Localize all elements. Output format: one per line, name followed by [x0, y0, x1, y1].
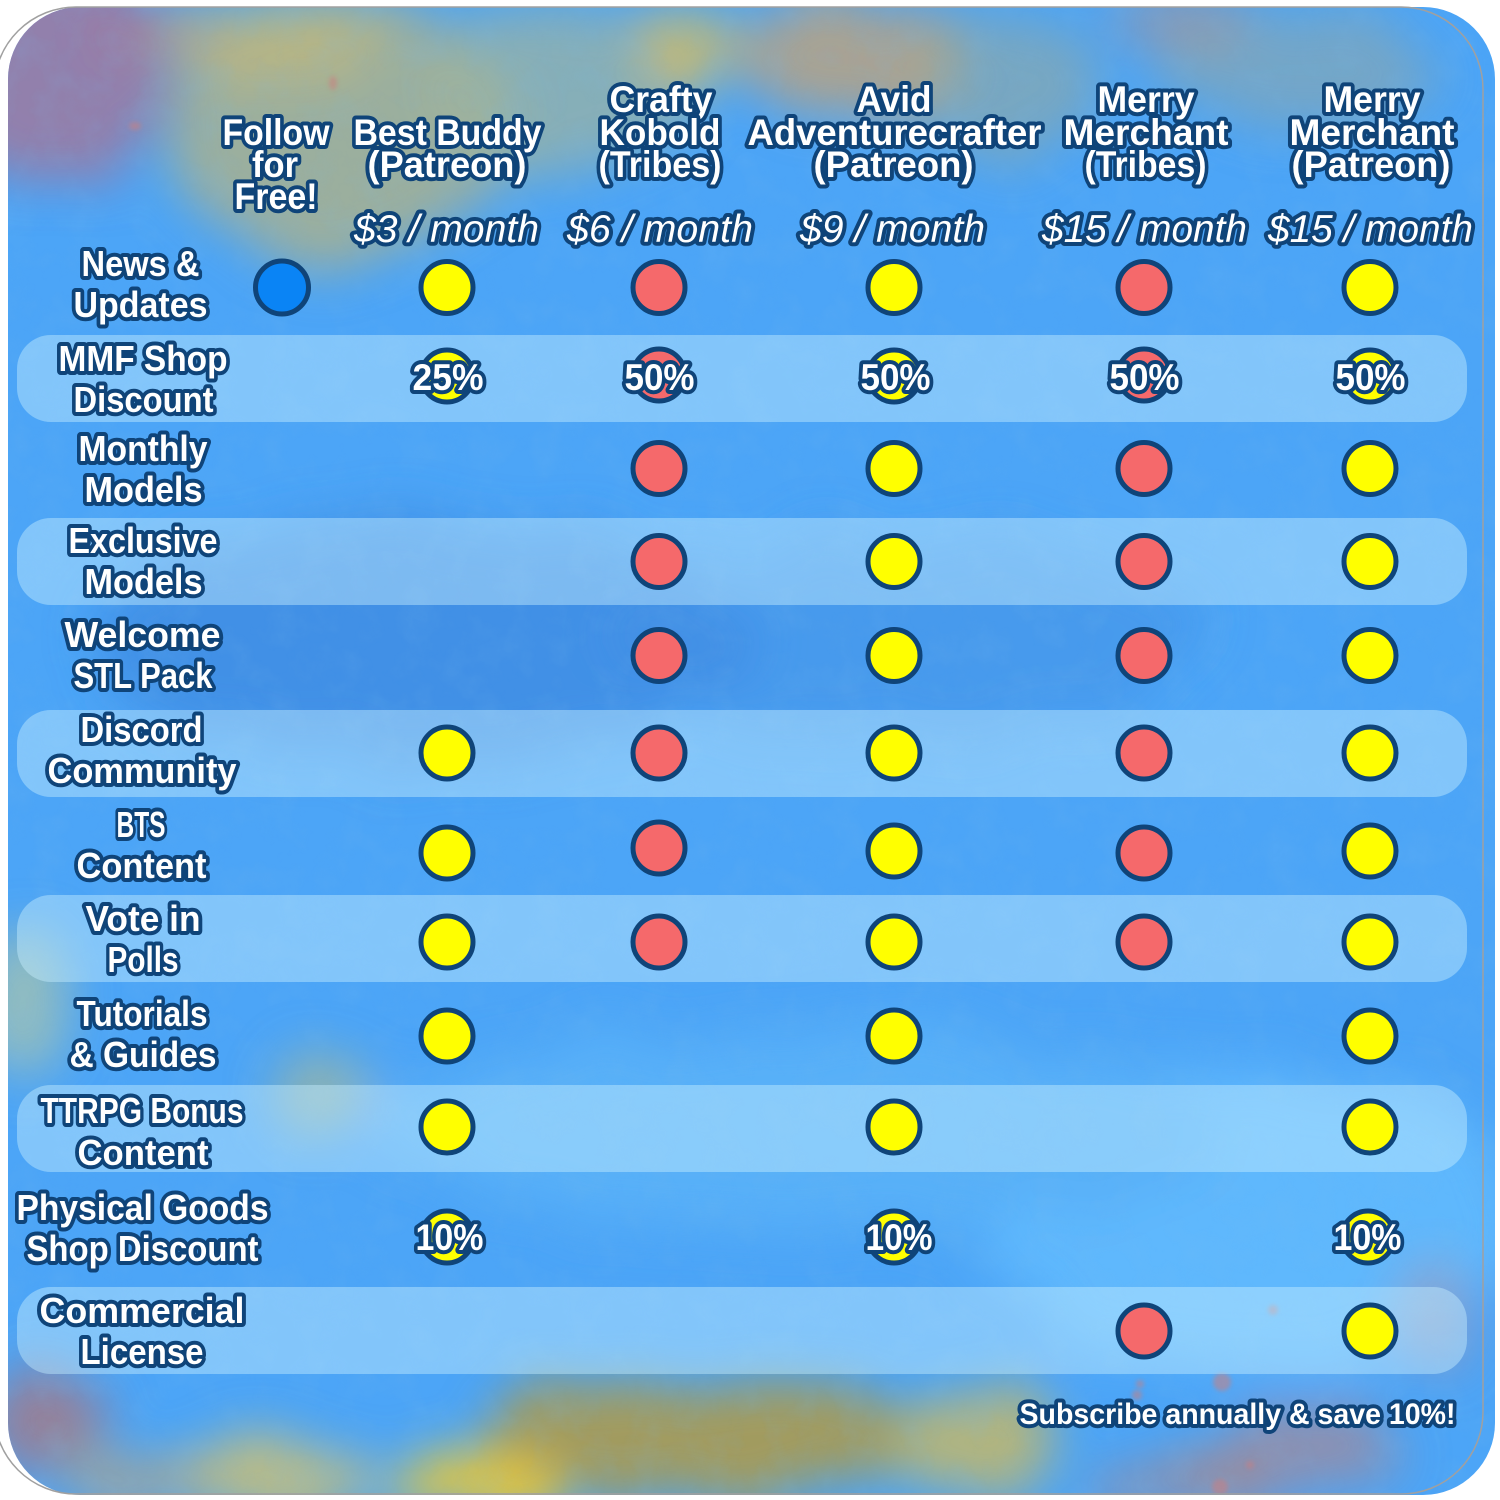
column header: Merry Merchant Patreon: Merry: [1324, 79, 1421, 120]
column header: Best Buddy: $3 / month: [353, 208, 539, 251]
row: Commercial License: [40, 1290, 1396, 1372]
row: MMF Shop Discount: 50%: [624, 357, 694, 398]
column header: Best Buddy: Best Buddy: [354, 112, 542, 153]
row: Discord Community: Community: [48, 750, 236, 791]
row: News & Updates: Updates: [74, 284, 208, 325]
column header: Merry Merchant Tribes: $15 / month: [1041, 208, 1247, 251]
row: MMF Shop Discount: MMF Shop: [58, 338, 228, 379]
row: MMF Shop Discount: [58, 338, 1406, 420]
row: Vote in Polls: Polls: [108, 939, 178, 980]
row: Exclusive Models: Exclusive: [68, 520, 218, 561]
row: Exclusive Models: Models: [84, 561, 202, 602]
column header: Crafty Kobold: $6 / month: [566, 208, 753, 251]
row: Tutorials & Guides: Tutorials: [76, 993, 208, 1034]
row: Physical Goods Shop Discount: Physical Goods: [16, 1187, 268, 1228]
row: BTS Content: [76, 804, 1396, 886]
row: TTRPG Bonus Content: TTRPG Bonus: [40, 1090, 244, 1131]
column header: Merry Merchant Tribes: Merchant: [1064, 112, 1228, 153]
column header: Merry Merchant Patreon: Merchant: [1290, 112, 1454, 153]
column header: Merry Merchant Tribes: (Tribes): [1084, 144, 1206, 185]
row bands: [17, 335, 1467, 1374]
row: MMF Shop Discount: Discount: [74, 379, 214, 420]
footnote: annual discount: Subscribe annually & save 10%!: [1020, 1398, 1456, 1431]
row: BTS Content: Content: [76, 845, 207, 886]
column header: Merry Merchant Patreon: (Patreon): [1292, 144, 1450, 185]
column header: Avid Adventurecrafter: $9 / month: [799, 208, 985, 251]
column header: Avid Adventurecrafter: [748, 79, 1042, 251]
row: Monthly Models: Models: [84, 469, 202, 510]
row: Tutorials & Guides: [70, 993, 1396, 1075]
row: Monthly Models: Monthly: [78, 428, 208, 469]
row: TTRPG Bonus Content: Content: [78, 1132, 209, 1173]
column header: Follow for Free: for: [252, 144, 298, 185]
row: Discord Community: Discord: [80, 709, 202, 750]
column header: Merry Merchant Patreon: $15 / month: [1267, 208, 1473, 251]
column header: Crafty Kobold: Kobold: [600, 112, 720, 153]
column header: Crafty Kobold: (Tribes): [598, 144, 722, 185]
row: MMF Shop Discount: 50%: [1336, 357, 1406, 398]
column header: Crafty Kobold: [566, 79, 753, 251]
column header: Follow for Free: [222, 112, 330, 217]
row: Physical Goods Shop Discount: 10%: [1334, 1217, 1402, 1258]
row: Monthly Models: [78, 428, 1396, 510]
row: Discord Community: [48, 709, 1396, 791]
column header: Avid Adventurecrafter: Adventurecrafter: [748, 112, 1042, 153]
column header: Follow for Free: Follow: [222, 112, 330, 153]
row: TTRPG Bonus Content: [40, 1090, 1396, 1173]
column header: Best Buddy: (Patreon): [368, 144, 526, 185]
row: MMF Shop Discount: 50%: [1110, 357, 1180, 398]
column header: Avid Adventurecrafter: Avid: [856, 79, 932, 120]
row: Physical Goods Shop Discount: Shop Discount: [26, 1228, 258, 1269]
row: MMF Shop Discount: 50%: [860, 357, 930, 398]
row: Physical Goods Shop Discount: [16, 1187, 1402, 1269]
column header: Merry Merchant Tribes: Merry: [1098, 79, 1195, 120]
column header: Merry Merchant Patreon: [1267, 79, 1473, 251]
row: News & Updates: [74, 243, 1396, 325]
row: Commercial License: License: [80, 1331, 204, 1372]
column header: Follow for Free: Free!: [234, 176, 318, 217]
column header: Avid Adventurecrafter: (Patreon): [814, 144, 974, 185]
row: News & Updates: News &: [82, 243, 200, 284]
row: Welcome STL Pack: Welcome: [64, 614, 220, 655]
row: Tutorials & Guides: & Guides: [70, 1034, 216, 1075]
row: Welcome STL Pack: STL Pack: [74, 655, 213, 696]
column header: Best Buddy: [353, 112, 542, 251]
row: Physical Goods Shop Discount: 10%: [866, 1217, 932, 1258]
column header: Crafty Kobold: Crafty: [610, 79, 713, 120]
row: Physical Goods Shop Discount: 10%: [416, 1217, 484, 1258]
row: MMF Shop Discount: 25%: [412, 357, 484, 398]
row: Commercial License: Commercial: [40, 1290, 244, 1331]
row: Welcome STL Pack: [64, 614, 1396, 696]
row: Vote in Polls: [86, 898, 1396, 980]
row: Vote in Polls: Vote in: [86, 898, 200, 939]
column header: Merry Merchant Tribes: [1041, 79, 1247, 251]
row: BTS Content: BTS: [116, 804, 166, 845]
row: Exclusive Models: [68, 520, 1396, 602]
